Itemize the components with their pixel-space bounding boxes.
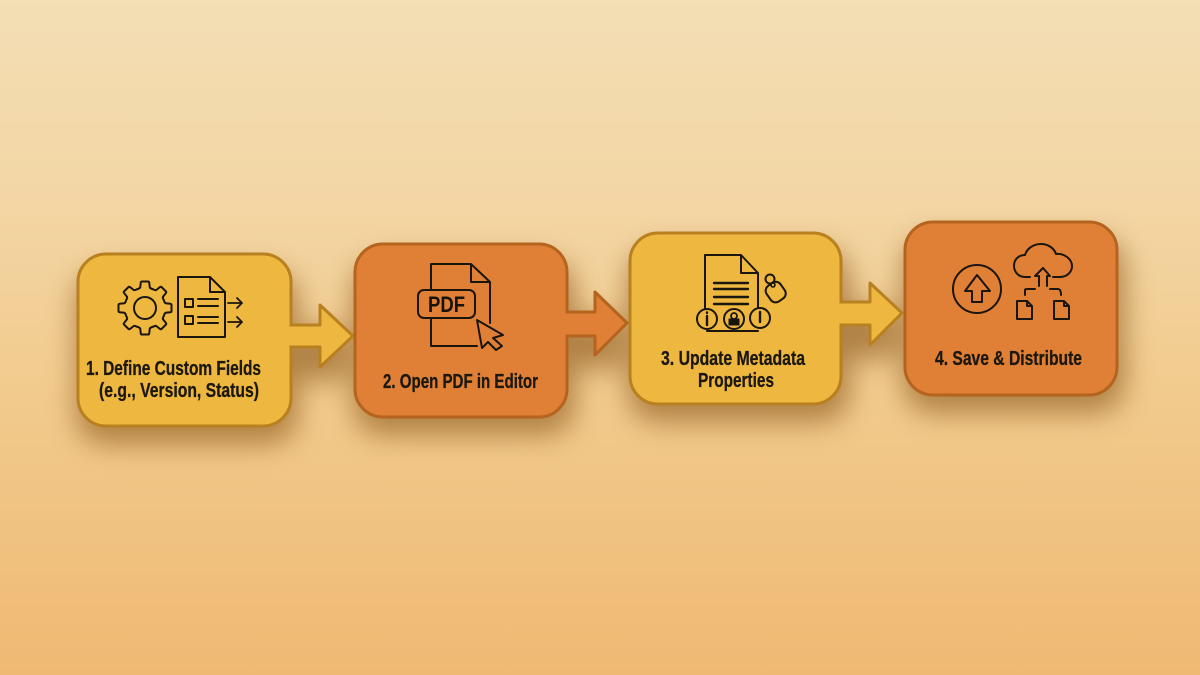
icon: PDF document with cursor: PDF [428,292,465,317]
label: step 1: (e.g., Version, Status) [99,380,259,402]
arrow: step 1 to step 2 [288,305,353,367]
label: step 3: 3. Update Metadata [661,348,806,370]
arrow: step 2 to step 3 [562,292,627,355]
label: step 1 [86,358,261,402]
panel: step 3 [630,233,841,404]
panel: step 1 [78,254,291,426]
label: step 3 [661,348,806,392]
icon: gear and checklist document [118,277,242,337]
icon: cloud distributing to documents [1014,244,1072,319]
icon: PDF document with cursor [418,264,503,350]
panel: step 2 [355,244,567,417]
panel: step 4 [905,222,1117,395]
icon: upload arrow in circle [953,265,1001,313]
icon: metadata document with tag [697,255,788,331]
arrow: step 3 to step 4 [836,283,902,345]
label: step 1: 1. Define Custom Fields [86,358,261,380]
label: step 4: 4. Save & Distribute [935,348,1082,370]
label: step 2: 2. Open PDF in Editor [383,371,538,393]
label: step 3: Properties [698,370,774,392]
